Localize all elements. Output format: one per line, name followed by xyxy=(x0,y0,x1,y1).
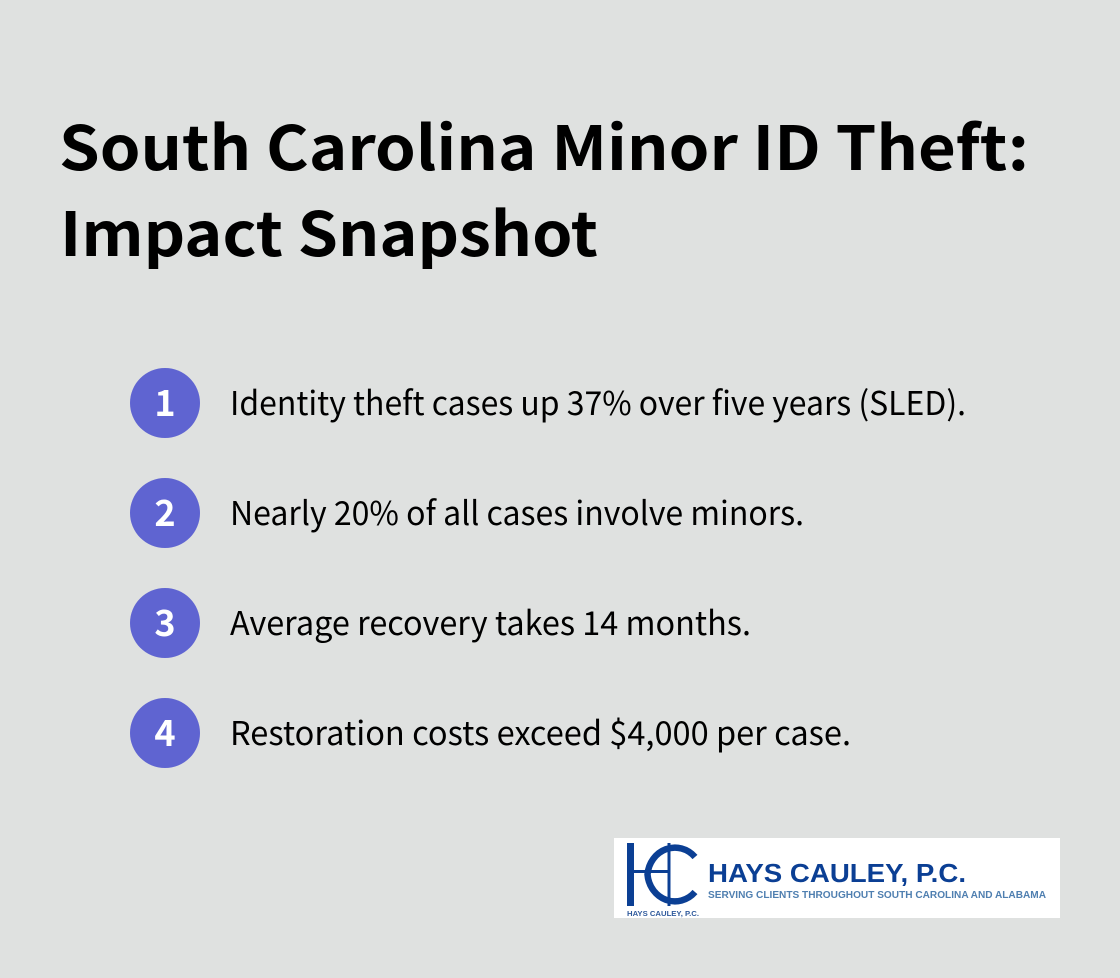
list item 3: Average recovery takes 14 months. xyxy=(230,597,751,645)
list item 1: Identity theft cases up 37% over five years (SLED). xyxy=(230,377,966,425)
tagline: SERVING CLIENTS THROUGHOUT SOUTH CAROLINA AND ALABAMA xyxy=(708,890,1046,901)
list item 2: Nearly 20% of all cases involve minors. xyxy=(230,487,804,535)
list item 2 xyxy=(130,478,804,548)
company name: HAYS CAULEY, P.C. xyxy=(708,858,966,888)
logo caption: HAYS CAULEY, P.C. xyxy=(627,911,699,918)
list item 1: 1 xyxy=(154,375,176,427)
list item 4 xyxy=(130,698,851,768)
list item 3: 3 xyxy=(154,595,176,647)
list item 1 xyxy=(130,368,966,438)
list item 3 xyxy=(130,588,751,658)
title: South Carolina Minor ID Theft: xyxy=(59,99,1029,188)
list item 2: 2 xyxy=(154,485,176,537)
list item 4: Restoration costs exceed $4,000 per case. xyxy=(230,707,851,755)
title xyxy=(59,99,1029,274)
icon: HC monogram xyxy=(630,843,695,906)
logo: Hays Cauley, P.C. xyxy=(614,838,1060,918)
title: Impact Snapshot xyxy=(60,185,598,274)
list item 4: 4 xyxy=(154,705,176,757)
